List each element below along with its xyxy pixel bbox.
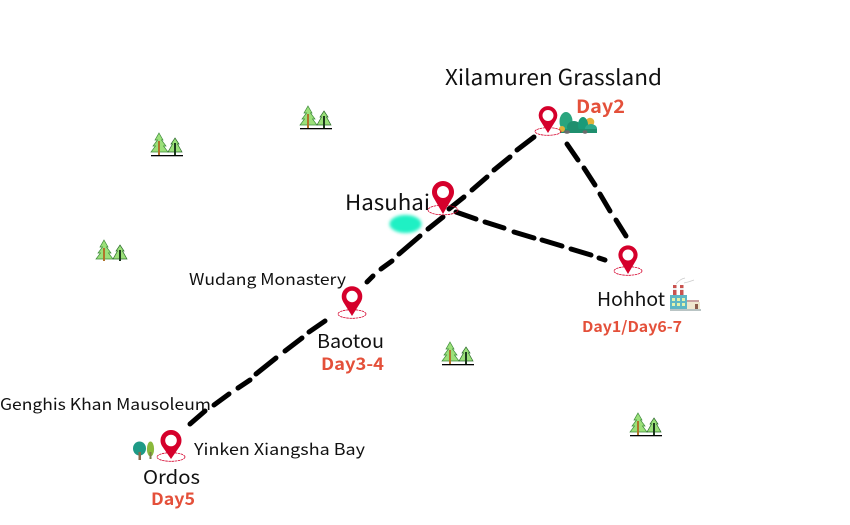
pin: Hasuhai bbox=[428, 181, 458, 215]
label: Xilamuren Grassland: Xilamuren Grassland bbox=[445, 61, 662, 92]
label: Day5: Day5 bbox=[151, 485, 195, 510]
lake: Hasuhai bbox=[390, 215, 422, 233]
icon: trees 4 bbox=[442, 342, 474, 365]
label: Genghis Khan Mausoleum: Genghis Khan Mausoleum bbox=[0, 391, 211, 415]
icon: factory bbox=[670, 278, 701, 311]
icon: trees 2 bbox=[300, 106, 332, 129]
label: Hasuhai: Hasuhai bbox=[345, 187, 430, 217]
icon: grassland bushes bbox=[559, 112, 597, 134]
dashed route: Hasuhai to Hohhot bbox=[456, 212, 605, 260]
label: Hohhot: Hohhot bbox=[597, 285, 665, 312]
label: Day2: Day2 bbox=[576, 93, 625, 119]
pin: Xilamuren Grassland bbox=[535, 106, 561, 135]
label: Baotou: Baotou bbox=[317, 327, 384, 354]
label: Day1/Day6-7: Day1/Day6-7 bbox=[582, 316, 682, 337]
label: Yinken Xiangsha Bay: Yinken Xiangsha Bay bbox=[193, 436, 366, 460]
pin: Ordos bbox=[157, 430, 185, 461]
label: Day3-4: Day3-4 bbox=[321, 350, 384, 375]
pin: Baotou bbox=[338, 286, 366, 318]
icon: trees 3 bbox=[96, 240, 127, 261]
label: Wudang Monastery: Wudang Monastery bbox=[189, 266, 347, 290]
icon: trees 1 bbox=[151, 133, 183, 156]
icon: Ordos trees bbox=[133, 442, 154, 460]
pin: Hohhot bbox=[614, 245, 642, 275]
icon: trees 5 bbox=[630, 413, 662, 436]
label: Ordos: Ordos bbox=[143, 463, 200, 490]
dashed route: Xilamuren Grassland to Hohhot bbox=[567, 144, 626, 236]
dashed route: Ordos to Xilamuren Grassland bbox=[190, 137, 534, 424]
